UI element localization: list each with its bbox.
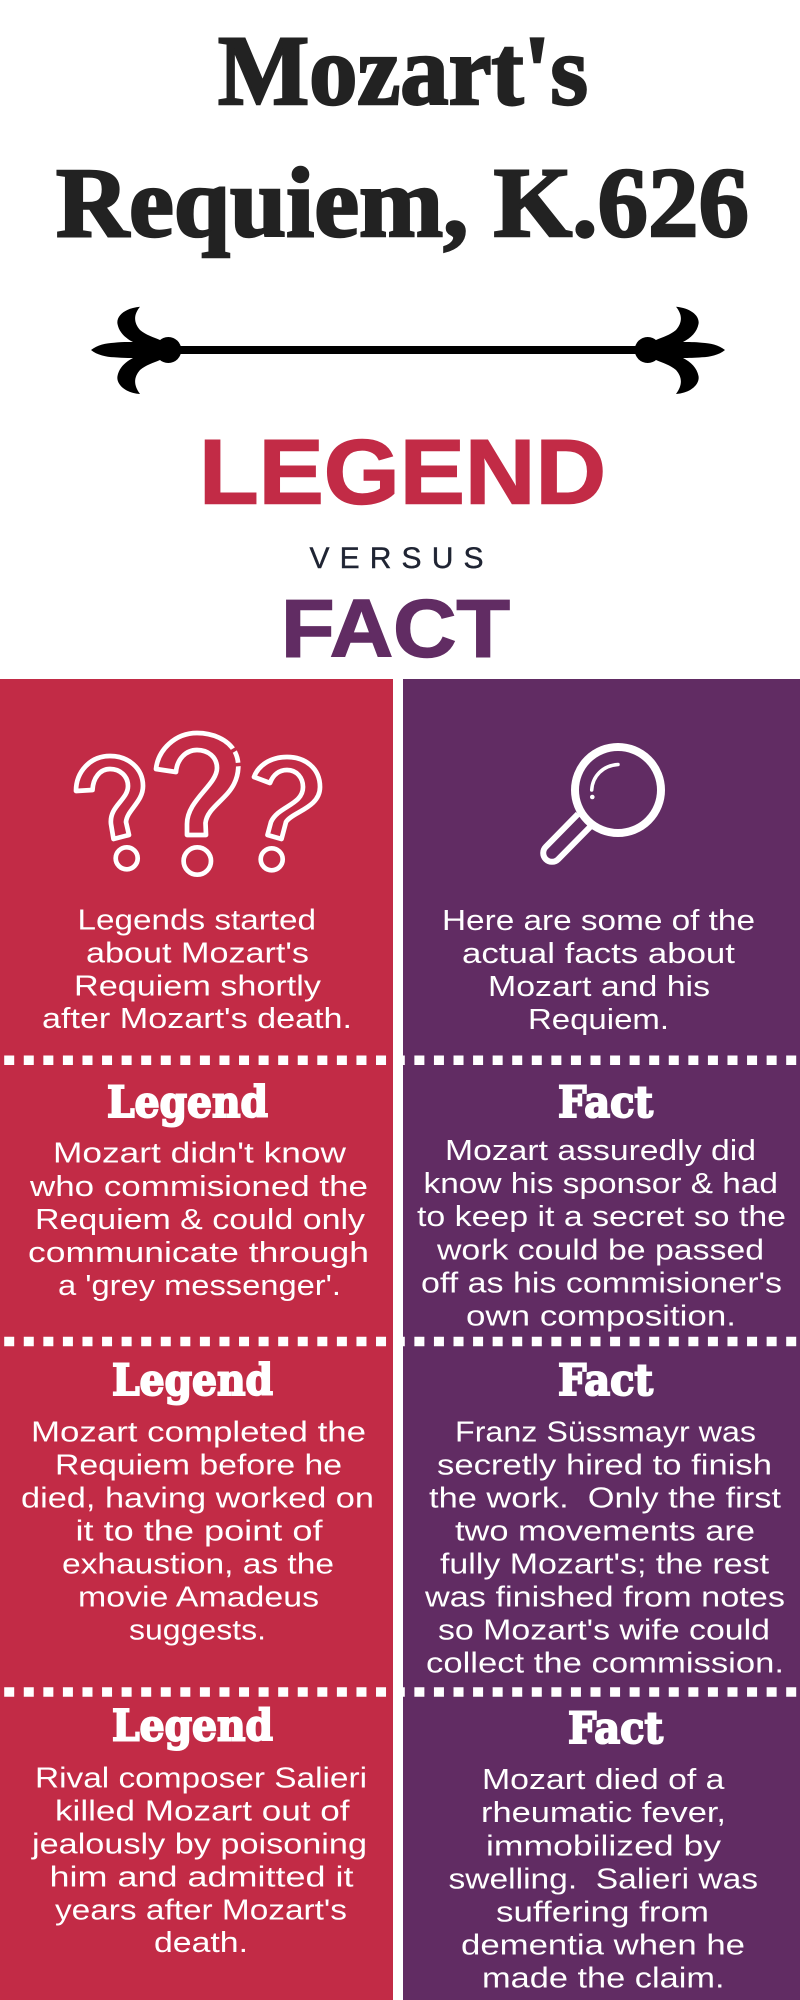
heading: legend: LEGEND	[199, 422, 606, 524]
text block: legend 1	[28, 1138, 369, 1302]
text block: legend 2	[21, 1416, 374, 1647]
text block: legends intro: about Mozart's	[86, 937, 309, 969]
text block: fact 3: suffering from	[496, 1896, 709, 1928]
dotted divider 3	[4, 1687, 797, 1697]
text block: legend 2: suggests.	[129, 1615, 266, 1647]
text block: legend 1: Requiem & could only	[35, 1204, 366, 1236]
text block: fact 1: own composition.	[466, 1300, 736, 1332]
heading: fact 1: Fact	[558, 1078, 653, 1128]
text block: fact 2: two movements are	[455, 1516, 755, 1548]
text block: fact 1: to keep it a secret so the	[417, 1201, 786, 1233]
text block: legend 2: it to the point of	[76, 1516, 324, 1548]
text block: legends intro: Requiem shortly	[74, 970, 322, 1002]
text block: fact 2: fully Mozart's; the rest	[440, 1549, 769, 1581]
text block: facts intro	[442, 905, 755, 1036]
text block: fact 1: know his sponsor & had	[424, 1168, 778, 1200]
text block: legend 2: Mozart completed the	[31, 1416, 366, 1448]
text block: fact 2: Franz Süssmayr was	[455, 1416, 756, 1448]
text block: fact 3: dementia when he	[461, 1929, 745, 1961]
text block: legend 1: a 'grey messenger'.	[58, 1270, 341, 1302]
text block: facts intro: Mozart and his	[488, 971, 710, 1003]
heading: legend 2: Legend	[112, 1356, 273, 1406]
text block: fact 2	[424, 1416, 785, 1680]
text block: fact 1	[417, 1135, 786, 1332]
text block: legends intro: Legends started	[78, 904, 316, 936]
text block: fact 2: was finished from notes	[424, 1582, 785, 1614]
text block: fact 3: made the claim.	[482, 1962, 724, 1994]
text block: legends intro: after Mozart's death.	[42, 1003, 352, 1035]
text block: fact 1: Mozart assuredly did	[445, 1135, 756, 1167]
text block: fact 2: collect the commission.	[426, 1648, 784, 1680]
text block: legend 2: movie Amadeus	[78, 1582, 319, 1614]
icon: ornamental divider	[91, 307, 725, 394]
heading: fact 3: Fact	[568, 1704, 663, 1754]
heading: legend 1: Legend	[107, 1078, 268, 1128]
text block: legend 3: Rival composer Salieri	[35, 1762, 367, 1794]
text block: fact 3: immobilized by	[486, 1831, 722, 1863]
dotted divider 2	[4, 1337, 797, 1346]
heading: versus: VERSUS	[310, 542, 484, 575]
text block: facts intro: Here are some of the	[442, 905, 755, 937]
text block: legend 2: died, having worked on	[21, 1482, 374, 1514]
text block: legend 1: Mozart didn't know	[53, 1138, 347, 1170]
dotted divider 1	[4, 1056, 797, 1065]
icon: magnifying glass	[543, 747, 661, 862]
title	[56, 15, 749, 258]
text block: facts intro: actual facts about	[462, 938, 735, 970]
text block: legend 1: communicate through	[28, 1237, 369, 1269]
text block: legend 3: jealously by poisoning	[31, 1828, 367, 1860]
text block: legend 2: Requiem before he	[55, 1449, 342, 1481]
text block: fact 3	[448, 1764, 758, 1994]
title: Requiem, K.626	[56, 147, 749, 258]
text block: legend 3: years after Mozart's	[55, 1894, 347, 1926]
text block: facts intro: Requiem.	[528, 1004, 669, 1036]
text block: fact 2: so Mozart's wife could	[438, 1615, 770, 1647]
text block: legends intro	[42, 904, 352, 1035]
text block: fact 3: Mozart died of a	[482, 1764, 726, 1796]
icon: question marks	[76, 733, 320, 875]
text block: legend 3: him and admitted it	[50, 1861, 354, 1893]
text block: legend 1: who commisioned the	[29, 1171, 368, 1203]
heading: legend 3: Legend	[112, 1702, 273, 1752]
panel: fact column	[403, 679, 800, 2000]
text block: legend 3: death.	[154, 1927, 248, 1959]
text block: fact 3: swelling. Salieri was	[448, 1864, 758, 1896]
text block: fact 1: work could be passed	[436, 1234, 764, 1266]
text block: legend 2: exhaustion, as the	[62, 1549, 334, 1581]
heading: fact: FACT	[281, 584, 510, 674]
text block: fact 1: off as his commisioner's	[421, 1267, 782, 1299]
text block: legend 3: killed Mozart out of	[55, 1795, 351, 1827]
text block: legend 3	[31, 1762, 367, 1959]
text block: fact 3: rheumatic fever,	[481, 1797, 726, 1829]
text block: fact 2: the work. Only the first	[429, 1482, 781, 1514]
panel: legend column	[0, 679, 393, 2000]
title: Mozart's	[218, 15, 588, 126]
text block: fact 2: secretly hired to finish	[437, 1449, 772, 1481]
heading: fact 2: Fact	[558, 1356, 653, 1406]
